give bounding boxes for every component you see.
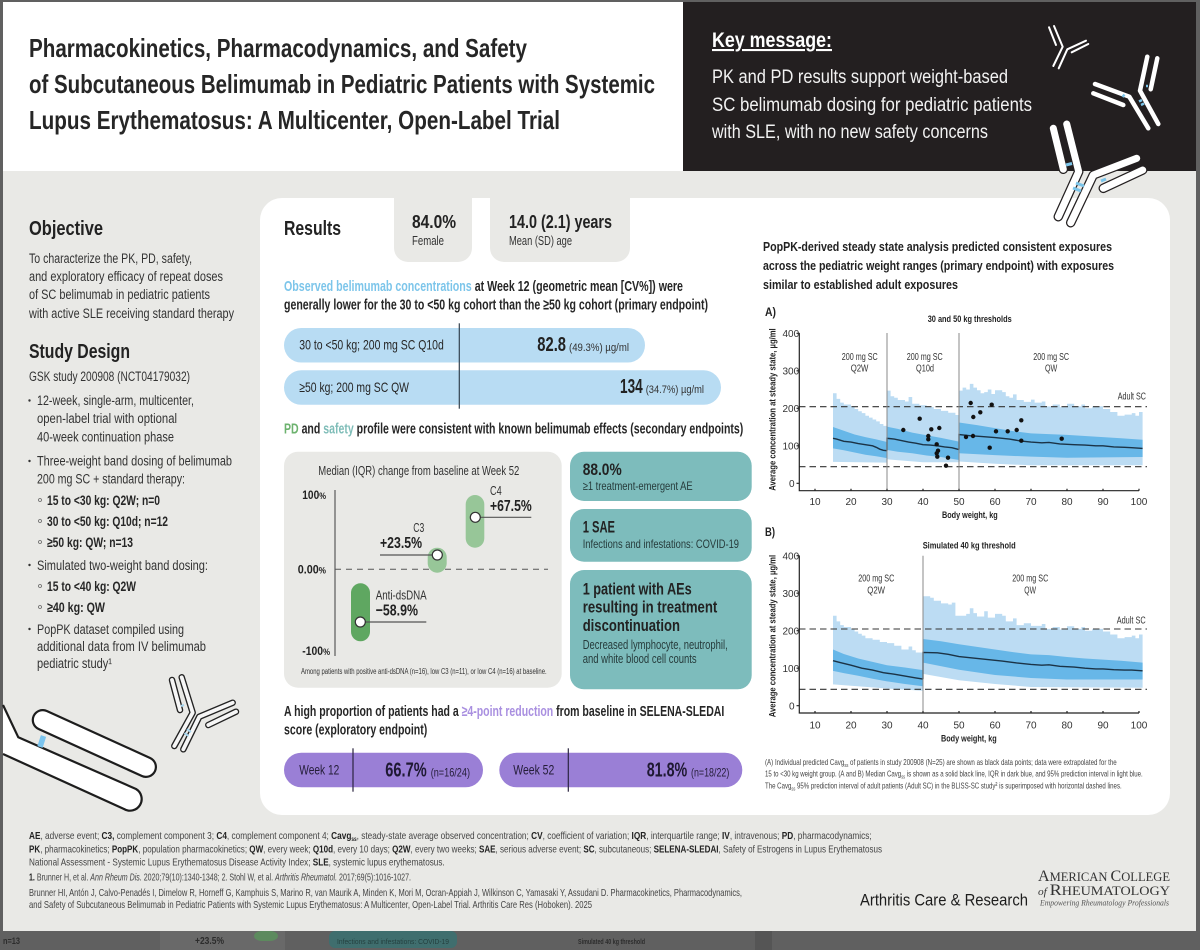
study design list: ≥50 kg: QW; n=13 [47,534,133,550]
chart B bands [833,596,1143,691]
panel: results background [260,198,1170,815]
bar: 30 to <50 kg: (49.3%) µg/ml [569,342,629,354]
chart B x tick labels [809,720,1148,731]
bar: week 52: Week 52 [513,761,554,777]
chart B y tick labels: 0 [789,702,795,712]
chart B x axis title: Body weight, kg [941,734,997,745]
abbreviations and references: , steady-state average observed concentration; [357,830,531,842]
chart note [765,757,1143,792]
bar chart: concentrations [284,323,721,409]
marker: C4 [466,484,532,548]
chart A y axis title: Average concentration at steady state, µg/ml [768,328,778,491]
card: SAE: Infections and infestations: COVID-19 [583,537,739,551]
chart B y tick labels: 400 [782,552,800,562]
title: of Subcutaneous Belimumab in Pediatric Patients with Systemic [29,69,655,99]
chart note: ss [844,763,848,769]
objective text [28,251,234,321]
study design list: additional data from IV belimumab [37,639,206,654]
chart A dose labels: Adult SC [1118,391,1146,402]
photo background remnants below the sheet: Simulated 40 kg threshold [578,939,645,946]
study design list: open-label trial with optional [37,411,177,426]
chart A y tick labels: 0 [789,479,795,490]
heading: PD and safety: PD and safety profile were consistent with known belimumab effects (secondary endpoints) [284,420,743,438]
heading: PopPK exposures: PopPK-derived steady state analysis predicted consistent exposures [763,239,1112,254]
study design list: 40-week continuation phase [37,430,174,444]
label B: B) [765,527,775,539]
card: treatment-emergent AE: 88.0% [583,460,622,479]
chart A data points [901,401,1064,468]
objective text: To characterize the PK, PD, safety, [29,251,192,266]
icon: large antibody fragment, bottom left [3,705,146,811]
chart B dashed adult SC limits [799,629,1147,689]
chart B x tick labels: 50 [953,720,965,731]
panel: median change chart [284,452,562,688]
title: Lupus Erythematosus: A Multicenter, Open-Label Trial [29,105,560,135]
chart A x tick labels: 100 [1131,497,1148,508]
study design list: pediatric study¹ [37,656,112,671]
objective text: with active SLE receiving standard therapy [28,306,234,321]
chart A dose labels: Q2W [851,364,869,375]
chart A x tick labels: 50 [953,497,965,508]
chart B y tick labels: 300 [782,589,800,600]
y axis [298,488,335,658]
chart A dose labels: Q10d [916,364,934,375]
chart B x tick labels: 30 [881,720,893,731]
chart A bands [833,384,1143,465]
key message heading: Key message: [712,29,832,52]
chart note: (A) Individual predicted Cavg [765,757,874,767]
study design list: 15 to <30 kg: Q2W; n=0 [47,492,160,508]
logo: American College of Rheumatology: Empowering Rheumatology Professionals [1039,898,1170,908]
card: treatment-emergent AE [570,452,752,501]
marker: C3 [380,521,447,573]
heading: study design: Study Design [29,341,130,363]
chart B x tick labels: 80 [1061,720,1073,731]
study design list: ≥40 kg: QW [47,599,106,615]
bar: 50 kg and above: (34.7%) µg/ml [646,384,704,396]
chart A dose labels: QW [1045,364,1058,375]
stat card: female: Female [412,234,444,248]
key message text: SC belimumab dosing for pediatric patients [712,95,1032,116]
chart A dose labels: 200 mg SC [907,352,943,363]
marker: C4: +67.5% [490,498,532,515]
card: SAE [570,509,752,562]
bar: 50 kg and above [284,370,721,405]
stat card: female [394,190,472,262]
chart B x tick labels: 20 [845,720,857,731]
bar: week 12: (n=16/24) [431,766,470,780]
objective text: and exploratory efficacy of repeat doses [29,269,223,284]
chart B x tick labels: 90 [1097,720,1109,731]
chart A y tick labels: 300 [782,366,800,378]
chart B title: Simulated 40 kg threshold [923,540,1016,551]
y axis: -100% [302,644,330,658]
chart B x tick labels: 70 [1025,720,1037,731]
chart A x axis title: Body weight, kg [942,510,998,521]
heading: SELENA-SLEDAI reduction: A high proportion of patients had a ≥4-point reduction from baseline in SELENA-SLEDAI [284,703,724,720]
heading: objective: Objective [29,218,103,240]
chart A x tick labels: 70 [1025,497,1037,508]
bar: week 12: 66.7% [385,760,427,782]
panel: adverse events [570,452,752,689]
bar: week 52: 81.8% [647,760,687,782]
abbreviations and references: 1. Brunner H, et al. Ann Rheum Dis. 2020;79(10):1340-1348; 2. Stohl W, et al. Arthritis Rheumatol. 2017;69(5):1016-1027. [29,872,411,884]
abbreviations and references: CV, coefficient of variation; IQR, interquartile range; IV, intravenous; PD, pharmacodynamics; [531,830,893,842]
icon: antibody large, header [1053,124,1143,223]
bar: 30 to <50 kg [284,328,645,362]
chart B dose labels [858,574,1146,626]
stat card: age [490,190,630,262]
chart B y tick labels [782,552,800,712]
study design list: 15 to <40 kg: Q2W [47,578,137,594]
panel: objective and study design [28,218,234,671]
study design list: 12-week, single-arm, multicenter, [37,393,194,408]
chart B dose labels: 200 mg SC [1012,574,1048,585]
bar: 30 to <50 kg: 82.8 [537,334,566,356]
card: discontinuation: and white blood cell counts [583,652,697,666]
chart A x tick labels: 20 [845,497,857,508]
abbreviations and references: National Assessment - Systemic Lupus Erythematosus Disease Activity Index; SLE, systemic lupus erythematosus. [29,857,445,869]
chart B: simulated 40 kg threshold [765,527,1148,745]
chart footnote: Among patients with positive anti-dsDNA (n=16), low C3 (n=11), or low C4 (n=16) at baseline. [301,667,547,676]
card: discontinuation: Decreased lymphocyte, neutrophil, [583,638,728,652]
study design list: Three-weight band dosing of belimumab [37,454,232,468]
chart A title: 30 and 50 kg thresholds [928,314,1012,325]
y axis: 0.00% [298,562,326,576]
photo background remnants below the sheet: +23.5% [195,936,224,947]
title [29,33,655,135]
stat card: age: Mean (SD) age [509,234,572,248]
chart A y tick labels [782,329,800,490]
chart B x tick labels: 10 [809,720,821,731]
chart B axes [796,556,1139,713]
chart A x tick labels: 60 [989,497,1001,508]
logo: American College of Rheumatology: AMERICAN COLLEGE [1038,868,1170,885]
panel: results summary header [284,190,630,262]
chart A x tick labels: 80 [1061,497,1073,508]
study design list: PopPK dataset compiled using [37,622,184,637]
card: discontinuation: 1 patient with AEs [583,579,692,598]
card: treatment-emergent AE: ≥1 treatment-emergent AE [583,479,693,493]
objective text: of SC belimumab in pediatric patients [29,287,210,302]
chart note: ss [901,775,905,781]
marker: C3: C3 [413,521,424,535]
abbreviations and references [29,830,882,911]
bar: week 52: (n=18/22) [691,766,729,780]
chart B x tick labels: 100 [1131,720,1148,731]
heading: observed concentrations [284,278,708,314]
label A: A) [765,307,776,319]
panel: key message [683,2,1196,171]
chart A: 30 and 50 kg thresholds [765,307,1148,521]
chart B dose labels: QW [1024,585,1036,596]
y axis: 100% [302,488,326,502]
abbreviations and references: and Safety of Subcutaneous Belimumab in Pediatric Patients with Systemic Lupus Erythematosus: A Multicenter, Open-Label Trial. Arthritis Care Res (Hoboken). 2025 [29,899,592,911]
bar: week 12: Week 12 [299,761,339,777]
heading: SELENA-SLEDAI reduction [284,703,724,738]
logo: American College of Rheumatology [1038,868,1170,908]
chart B dose labels: 200 mg SC [858,574,894,585]
marker: anti-dsDNA [351,583,427,641]
key message text [711,67,1032,143]
chart A thresholds [887,333,959,491]
marker: anti-dsDNA: Anti-dsDNA [376,588,427,602]
heading: observed concentrations: Observed belimumab concentrations at Week 12 (geometric mean [CV%]) were [284,278,683,295]
study design list: Simulated two-weight band dosing: [37,558,208,573]
chart A x tick labels: 40 [917,497,929,508]
marker: anti-dsDNA: −58.9% [376,603,418,620]
chart A dashed adult SC limits [799,407,1147,467]
study design list: 200 mg SC + standard therapy: [37,472,185,486]
heading: observed concentrations: generally lower for the 30 to <50 kg cohort than the ≥50 kg cohort (primary endpoint) [284,296,708,314]
photo background remnants below the sheet: Infections and infestations: COVID-19 [337,939,449,946]
heading: PopPK exposures: similar to established adult exposures [763,277,958,292]
icon: antibody outline, left column [172,677,236,749]
chart B y axis title: Average concentration at steady state, µg/ml [768,555,778,717]
stat card: female: 84.0% [412,212,456,232]
card: discontinuation [570,570,752,689]
chart A dose labels: 200 mg SC [1033,352,1069,363]
marker: C4: C4 [490,484,502,498]
card: SAE: 1 SAE [583,518,615,537]
journal name: Arthritis Care & Research [860,890,1028,910]
icon: antibody medium, header [1093,57,1158,128]
chart A dose labels: 200 mg SC [842,352,878,363]
chart A x tick labels: 90 [1097,497,1109,508]
chart B x tick labels: 60 [989,720,1001,731]
card: discontinuation: resulting in treatment [583,598,718,617]
heading: PopPK exposures: across the pediatric weight ranges (primary endpoint) with exposures [763,258,1114,273]
chart B dose labels: Adult SC [1117,615,1146,626]
chart A y tick labels: 200 [782,404,800,415]
key message text: PK and PD results support weight-based [712,67,1008,88]
abbreviations and references: Brunner HI, Antón J, Calvo-Penadés I, Dimelow R, Horneff G, Kamphuis S, Marino R, van Maurik A, Minden K, Mori M, Ocran-Appiah J, Wilkinson C, Yamasaki Y, Assudani D. Pharmacokinetics, Pharmacodynamics, [29,887,742,899]
chart B dose labels: Q2W [867,585,885,596]
heading: PopPK exposures [763,239,1114,292]
bar: week 12 [284,748,483,792]
bar: 50 kg and above: ≥50 kg; 200 mg SC QW [299,379,410,395]
heading: results: Results [284,218,341,240]
chart note: ss [791,786,796,792]
study design list: 30 to <50 kg: Q10d; n=12 [47,513,168,529]
study design list: GSK study 200908 (NCT04179032) [29,369,190,384]
title: Pharmacokinetics, Pharmacodynamics, and Safety [29,33,527,63]
abbreviations and references: AE, adverse event; C3, complement component 3; C4, complement component 4; Cavg [29,830,357,842]
icon: antibody small, header [1049,26,1088,68]
chart A x tick labels: 30 [881,497,893,508]
chart A x tick labels [809,497,1148,508]
stat card: age: 14.0 (2.1) years [509,212,612,232]
chart B y tick labels: 100 [782,664,800,675]
key message text: with SLE, with no new safety concerns [711,122,988,143]
chart A dose labels [842,352,1146,402]
marker: C3: +23.5% [380,535,422,552]
chart B y tick labels: 200 [782,626,800,638]
chart note: 15 to <30 kg weight group. (A and B) Median Cavg [765,769,956,779]
study design list [28,369,232,671]
photo background remnants below the sheet [3,931,772,950]
chart A y tick labels: 400 [782,329,800,340]
bar: week 52 [499,748,742,792]
chart note: The Cavg [765,780,802,790]
chart A x tick labels: 10 [809,497,821,508]
bar: 30 to <50 kg: 30 to <50 kg; 200 mg SC Q10d [299,336,444,352]
chart A axes [796,333,1139,491]
abbreviations and references: PK, pharmacokinetics; PopPK, population pharmacokinetics; QW, every week; Q10d, every 10 days; Q2W, every two weeks; SAE, serious adverse event; SC, subcutaneous; SELENA-SLEDAI, Safety of Estrogens in Lupus Erythematosus [29,844,882,856]
chart A y tick labels: 100 [782,442,800,452]
chart title: Median (IQR) change from baseline at Week 52 [318,463,519,478]
photo background remnants below the sheet: n=13 [3,936,20,946]
bar: 50 kg and above: 134 [620,376,643,398]
abbreviations and references: ss [351,837,357,843]
chart B x tick labels: 40 [917,720,929,731]
chart B threshold [922,556,924,713]
card: discontinuation: discontinuation [583,616,680,635]
logo: American College of Rheumatology: of RHEUMATOLOGY [1038,882,1170,899]
heading: SELENA-SLEDAI reduction: score (exploratory endpoint) [284,721,427,738]
panel: title header [3,2,683,171]
